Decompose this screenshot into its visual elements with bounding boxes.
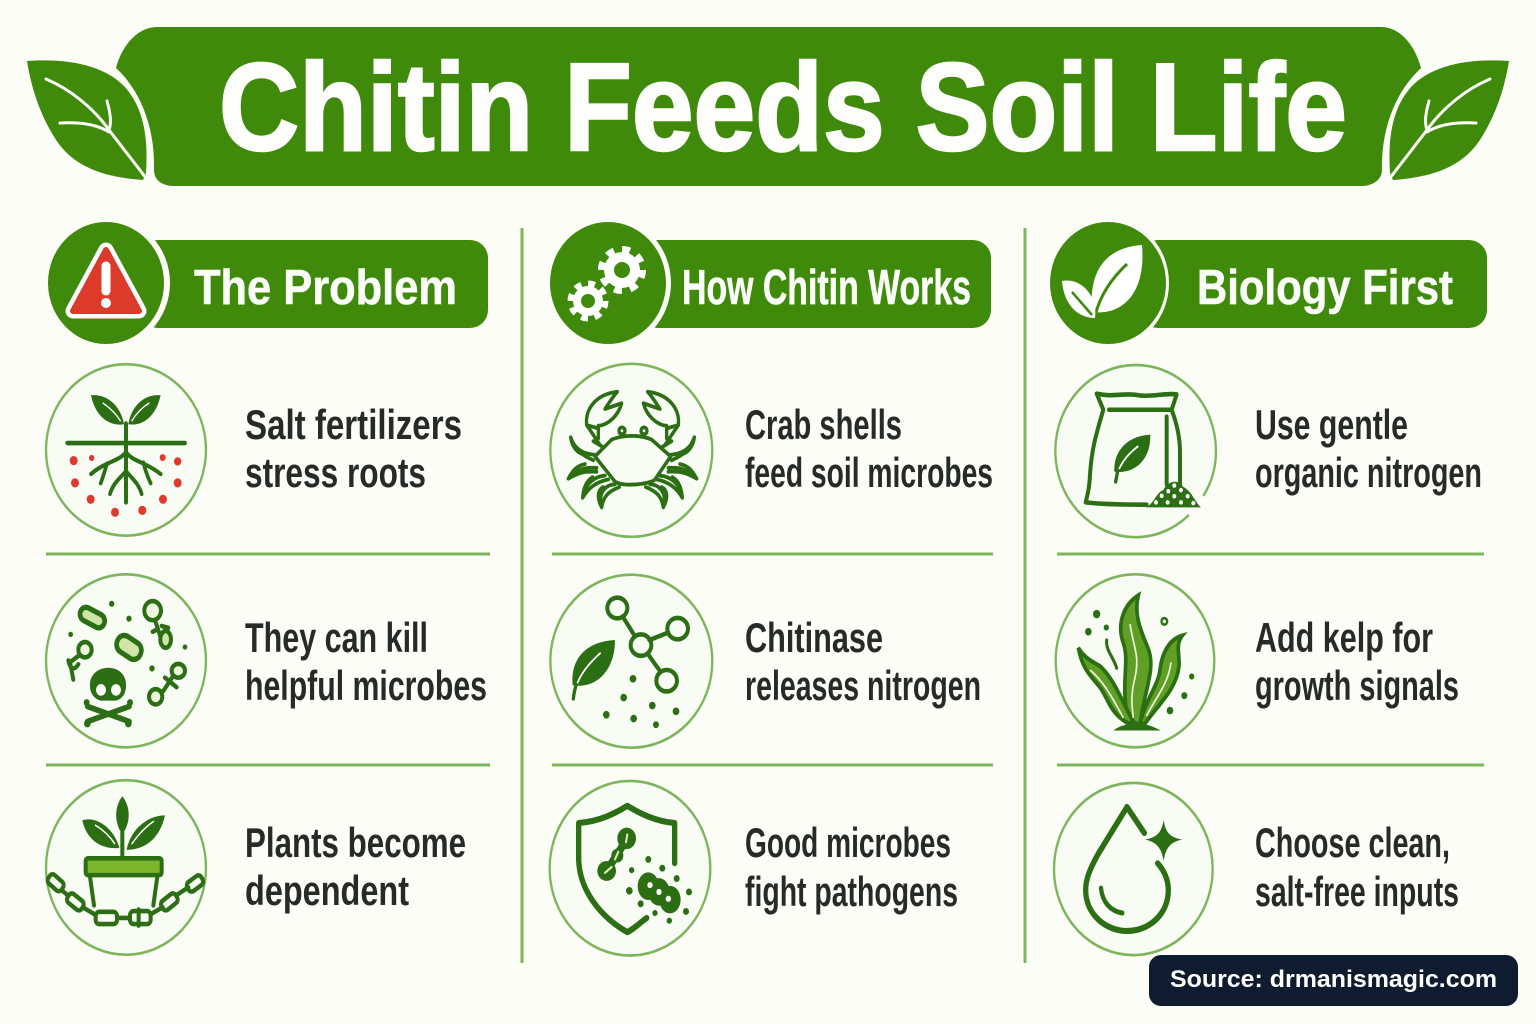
text: plants dependent: Plants become — [245, 819, 466, 866]
icon: fertilizer bag — [1055, 365, 1216, 537]
text: salt fertilizers — [245, 401, 462, 496]
icon: shield and microbes — [550, 781, 710, 955]
heading text: How Chitin Works — [682, 261, 971, 315]
text: kill microbes — [245, 614, 487, 709]
source badge — [1149, 955, 1518, 1006]
icon: warning triangle — [73, 250, 139, 311]
icon: white leaves — [1062, 245, 1142, 318]
panel: column 1 text — [245, 401, 487, 914]
text: good microbes — [745, 819, 958, 915]
text: clean inputs — [1255, 819, 1459, 915]
panel: column 1 icons — [46, 364, 206, 955]
header: Biology First — [1049, 218, 1487, 348]
text: salt fertilizers: Salt fertilizers — [245, 401, 462, 448]
text: crab shells: feed soil microbes — [745, 449, 993, 496]
icon: potted plant in chains — [46, 780, 206, 955]
text: clean inputs: Choose clean, — [1255, 819, 1450, 866]
header: The Problem — [44, 217, 488, 349]
text: good microbes: Good microbes — [745, 819, 951, 866]
icon: dying microbes and skull — [46, 574, 206, 747]
text: crab shells — [745, 401, 993, 496]
text: chitinase: releases nitrogen — [745, 662, 981, 709]
text: chitinase — [745, 614, 981, 709]
panel: column 3 text — [1255, 401, 1482, 915]
icon: crab — [550, 364, 712, 537]
text: chitinase: Chitinase — [745, 614, 883, 661]
text: kill microbes: helpful microbes — [245, 662, 487, 709]
panel: column 2 text — [745, 401, 993, 915]
text: kelp — [1255, 614, 1459, 709]
panel: column 2 icons — [550, 364, 712, 955]
text: kelp: Add kelp for — [1255, 614, 1433, 661]
panel: column 3 icons — [1054, 365, 1216, 955]
heading text: The Problem — [194, 261, 457, 315]
title banner — [116, 27, 1421, 186]
header: How Chitin Works — [547, 217, 991, 349]
text: plants dependent — [245, 819, 466, 914]
column dividers — [46, 228, 1484, 963]
text: gentle nitrogen: Use gentle — [1255, 401, 1408, 448]
text: gentle nitrogen — [1255, 401, 1482, 496]
text: crab shells: Crab shells — [745, 401, 902, 448]
icon: right leaf — [1389, 60, 1509, 180]
icon: gears — [571, 250, 642, 318]
icon: roots and salt — [46, 364, 206, 536]
icon: clean water drop — [1054, 783, 1213, 955]
icon: kelp — [1056, 574, 1214, 747]
text: salt fertilizers: stress roots — [245, 449, 426, 496]
text: kill microbes: They can kill — [245, 614, 428, 661]
text: plants dependent: dependent — [245, 867, 409, 914]
text: good microbes: fight pathogens — [745, 868, 958, 915]
heading text: Biology First — [1197, 261, 1453, 315]
icon: left leaf — [27, 60, 147, 180]
title text: Chitin Feeds Soil Life — [219, 39, 1347, 177]
source badge: Source: drmanismagic.com — [1170, 966, 1497, 993]
icon: molecule and leaf — [550, 575, 712, 748]
